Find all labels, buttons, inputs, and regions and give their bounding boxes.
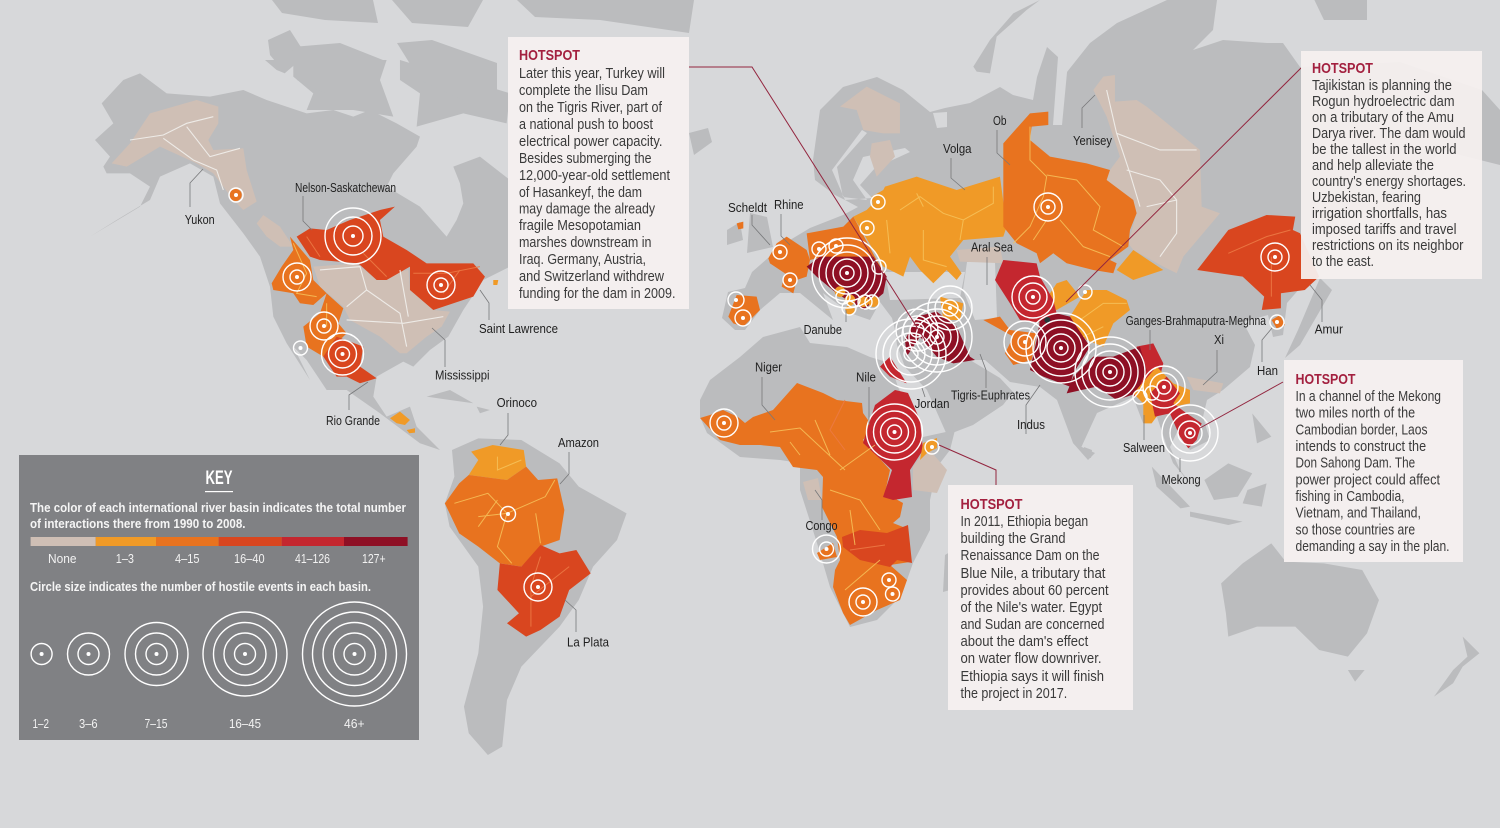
panel: hotspot Tajikistan Rogun Dam: on a tributary of the Amu bbox=[1312, 110, 1454, 126]
panel: hotspot Laos Don Sahong Dam: so those countries are bbox=[1296, 522, 1415, 538]
river basin labels: Han bbox=[1257, 364, 1278, 378]
panel: hotspot Turkey Ilisu Dam: Besides submerging the bbox=[519, 151, 652, 167]
river basin labels: Amazon bbox=[558, 436, 599, 450]
circle size labels: 16–45 bbox=[229, 716, 261, 731]
river basin labels: Yenisey bbox=[1073, 134, 1113, 148]
river basin labels bbox=[185, 114, 1343, 650]
panel: hotspot Turkey Ilisu Dam: Later this year, Turkey will bbox=[519, 66, 665, 82]
river basin labels: Ob bbox=[993, 114, 1007, 128]
colour scale labels: 16–40 bbox=[234, 551, 265, 566]
circle size labels: 1–2 bbox=[32, 716, 49, 731]
colour scale labels bbox=[48, 551, 386, 566]
river basin labels: Aral Sea bbox=[971, 240, 1013, 254]
panel: hotspot Tajikistan Rogun Dam: restrictions on its neighbor bbox=[1312, 238, 1464, 254]
panel: hotspot Turkey Ilisu Dam: on the Tigris River, part of bbox=[519, 100, 663, 116]
panel: hotspot Tajikistan Rogun Dam: country's energy shortages. bbox=[1312, 174, 1466, 190]
leader lines for river labels bbox=[190, 95, 1322, 632]
panel: hotspot Ethiopia Grand Renaissance Dam: of the Nile's water. Egypt bbox=[960, 600, 1102, 616]
panel: hotspot Ethiopia Grand Renaissance Dam: on water flow downriver. bbox=[960, 651, 1102, 667]
river basin labels: Danube bbox=[804, 323, 842, 337]
panel: hotspot Laos Don Sahong Dam: fishing in Cambodia, bbox=[1296, 489, 1404, 505]
hostile event circles bbox=[229, 188, 1289, 616]
panel: hotspot Ethiopia Grand Renaissance Dam: building the Grand bbox=[960, 531, 1066, 547]
circle size explanation: Circle size indicates the number of hostile events in each basin. bbox=[30, 579, 371, 594]
australia and oceania land bbox=[1152, 413, 1479, 697]
panel: hotspot Ethiopia Grand Renaissance Dam: Ethiopia says it will finish bbox=[960, 669, 1104, 685]
colour scale labels: None bbox=[48, 551, 76, 566]
river basin labels: Scheldt bbox=[728, 201, 767, 215]
river basin labels: La Plata bbox=[567, 636, 609, 650]
colour scale labels: 4–15 bbox=[175, 551, 200, 566]
river basins: Africa bbox=[700, 383, 947, 625]
panel: hotspot Laos Don Sahong Dam: demanding a say in the plan. bbox=[1296, 539, 1450, 555]
river basin labels: Salween bbox=[1123, 441, 1165, 455]
river basin labels: Rhine bbox=[774, 198, 804, 212]
river basin labels: Indus bbox=[1017, 418, 1045, 432]
north america land bbox=[90, 60, 510, 450]
river basin labels: Congo bbox=[806, 519, 838, 533]
panel: hotspot Turkey Ilisu Dam: electrical power capacity. bbox=[519, 134, 662, 150]
panel: hotspot Laos Don Sahong Dam: Vietnam, and Thailand, bbox=[1296, 506, 1421, 522]
river basin labels: Nelson-Saskatchewan bbox=[295, 181, 396, 195]
river basins: Middle East and south Asia bbox=[880, 260, 1285, 448]
panel: hotspot Turkey Ilisu Dam: funding for the dam in 2009. bbox=[519, 286, 676, 302]
circle size labels bbox=[32, 716, 365, 731]
river basins: Amur and Han bbox=[1197, 215, 1319, 310]
panel: hotspot Laos Don Sahong Dam: Cambodian border, Laos bbox=[1296, 422, 1428, 438]
panel: hotspot Tajikistan Rogun Dam: irrigation shortfalls, has bbox=[1312, 206, 1447, 222]
circle size labels: 3–6 bbox=[79, 716, 98, 731]
panel: hotspot Tajikistan Rogun Dam: and help alleviate the bbox=[1312, 158, 1434, 174]
panel: hotspot Tajikistan Rogun Dam: imposed tariffs and travel bbox=[1312, 222, 1456, 238]
panel: hotspot Ethiopia Grand Renaissance Dam: HOTSPOT bbox=[960, 496, 1022, 513]
panel: hotspot Tajikistan Rogun Dam: Uzbekistan, fearing bbox=[1312, 190, 1421, 206]
river basin labels: Xi bbox=[1214, 333, 1224, 347]
panel: hotspot Tajikistan Rogun Dam: HOTSPOT bbox=[1312, 60, 1373, 77]
river basins: South America bbox=[445, 445, 591, 637]
colour scale labels: 127+ bbox=[362, 551, 386, 566]
circle size labels: 46+ bbox=[344, 716, 365, 731]
river basin labels: Rio Grande bbox=[326, 414, 380, 428]
panel: hotspot Tajikistan Rogun Dam: Rogun hydroelectric dam bbox=[1312, 94, 1454, 110]
river basin labels: Saint Lawrence bbox=[479, 322, 558, 336]
hotspot connector lines bbox=[689, 67, 1301, 485]
panel: hotspot Turkey Ilisu Dam: HOTSPOT bbox=[519, 47, 580, 64]
panel: hotspot Turkey Ilisu Dam: fragile Mesopotamian bbox=[519, 218, 641, 234]
panel: hotspot Turkey Ilisu Dam: and Switzerland withdrew bbox=[519, 269, 664, 285]
south america land bbox=[445, 438, 627, 755]
circle size labels: 7–15 bbox=[144, 716, 168, 731]
key colour explanation bbox=[30, 500, 406, 531]
panel: hotspot Turkey Ilisu Dam bbox=[508, 37, 689, 309]
river basin labels: Amur bbox=[1315, 322, 1343, 336]
river basin labels: Orinoco bbox=[497, 396, 537, 410]
panel: hotspot Tajikistan Rogun Dam: Darya river. The dam would bbox=[1312, 126, 1466, 142]
river basin labels: Nile bbox=[856, 370, 876, 384]
river basins: western Europe bbox=[728, 217, 887, 327]
panel: hotspot Tajikistan Rogun Dam: be the tallest in the world bbox=[1312, 142, 1456, 158]
river basin labels: Jordan bbox=[915, 397, 950, 411]
panel: hotspot Laos Don Sahong Dam: power project could affect bbox=[1296, 472, 1440, 488]
panel: key bbox=[19, 455, 419, 740]
panel: hotspot Ethiopia Grand Renaissance Dam bbox=[948, 485, 1133, 710]
panel: hotspot Tajikistan Rogun Dam: to the east. bbox=[1312, 254, 1374, 270]
key colour explanation: of interactions there from 1990 to 2008. bbox=[30, 516, 246, 531]
colour scale labels: 1–3 bbox=[116, 551, 134, 566]
colour scale bar bbox=[31, 537, 408, 546]
panel: hotspot Ethiopia Grand Renaissance Dam: about the dam's effect bbox=[960, 634, 1088, 650]
panel: hotspot Ethiopia Grand Renaissance Dam: Blue Nile, a tributary that bbox=[960, 566, 1106, 582]
river basins: Europe and north Asia bbox=[840, 75, 1220, 283]
key title bbox=[205, 468, 233, 492]
panel: hotspot Tajikistan Rogun Dam bbox=[1301, 51, 1482, 279]
panel: hotspot Turkey Ilisu Dam: of Hasankeyf, the dam bbox=[519, 185, 642, 201]
key title: KEY bbox=[206, 468, 233, 489]
panel: hotspot Turkey Ilisu Dam: complete the Ilisu Dam bbox=[519, 83, 648, 99]
colour scale labels: 41–126 bbox=[295, 551, 330, 566]
river basin labels: Tigris-Euphrates bbox=[951, 388, 1030, 402]
panel: hotspot Tajikistan Rogun Dam: Tajikistan is planning the bbox=[1312, 78, 1452, 94]
panel: hotspot Ethiopia Grand Renaissance Dam: Renaissance Dam on the bbox=[960, 548, 1100, 564]
panel: hotspot Turkey Ilisu Dam: marshes downstream in bbox=[519, 235, 652, 251]
river basin labels: Mekong bbox=[1162, 473, 1201, 487]
panel: hotspot Ethiopia Grand Renaissance Dam: the project in 2017. bbox=[960, 686, 1067, 702]
panel: hotspot Laos Don Sahong Dam: In a channel of the Mekong bbox=[1296, 389, 1441, 405]
panel: hotspot Turkey Ilisu Dam: 12,000-year-old settlement bbox=[519, 168, 670, 184]
river basins: North America bbox=[112, 100, 498, 433]
panel: hotspot Ethiopia Grand Renaissance Dam: and Sudan are concerned bbox=[960, 617, 1104, 633]
panel: hotspot Turkey Ilisu Dam: Iraq. Germany, Austria, bbox=[519, 252, 646, 268]
panel: hotspot Laos Don Sahong Dam: Don Sahong Dam. The bbox=[1296, 456, 1415, 472]
panel: hotspot Turkey Ilisu Dam: may damage the already bbox=[519, 202, 656, 218]
key colour explanation: The color of each international river basin indicates the total number bbox=[30, 500, 406, 515]
river basin labels: Yukon bbox=[185, 213, 215, 227]
panel: hotspot Ethiopia Grand Renaissance Dam: provides about 60 percent bbox=[960, 583, 1108, 599]
panel: hotspot Laos Don Sahong Dam: two miles north of the bbox=[1296, 406, 1415, 422]
panel: hotspot Turkey Ilisu Dam: a national push to boost bbox=[519, 117, 653, 133]
river basin labels: Mississippi bbox=[435, 368, 490, 382]
panel: hotspot Laos Don Sahong Dam bbox=[1284, 360, 1463, 562]
panel: hotspot Laos Don Sahong Dam: HOTSPOT bbox=[1296, 371, 1356, 388]
panel: hotspot Ethiopia Grand Renaissance Dam: In 2011, Ethiopia began bbox=[960, 514, 1088, 530]
river basin labels: Volga bbox=[943, 142, 972, 156]
circle size legend bbox=[31, 602, 406, 706]
river basin labels: Niger bbox=[755, 360, 782, 374]
panel: hotspot Laos Don Sahong Dam: intends to construct the bbox=[1296, 439, 1426, 455]
river basin labels: Ganges-Brahmaputra-Meghna bbox=[1126, 314, 1266, 328]
